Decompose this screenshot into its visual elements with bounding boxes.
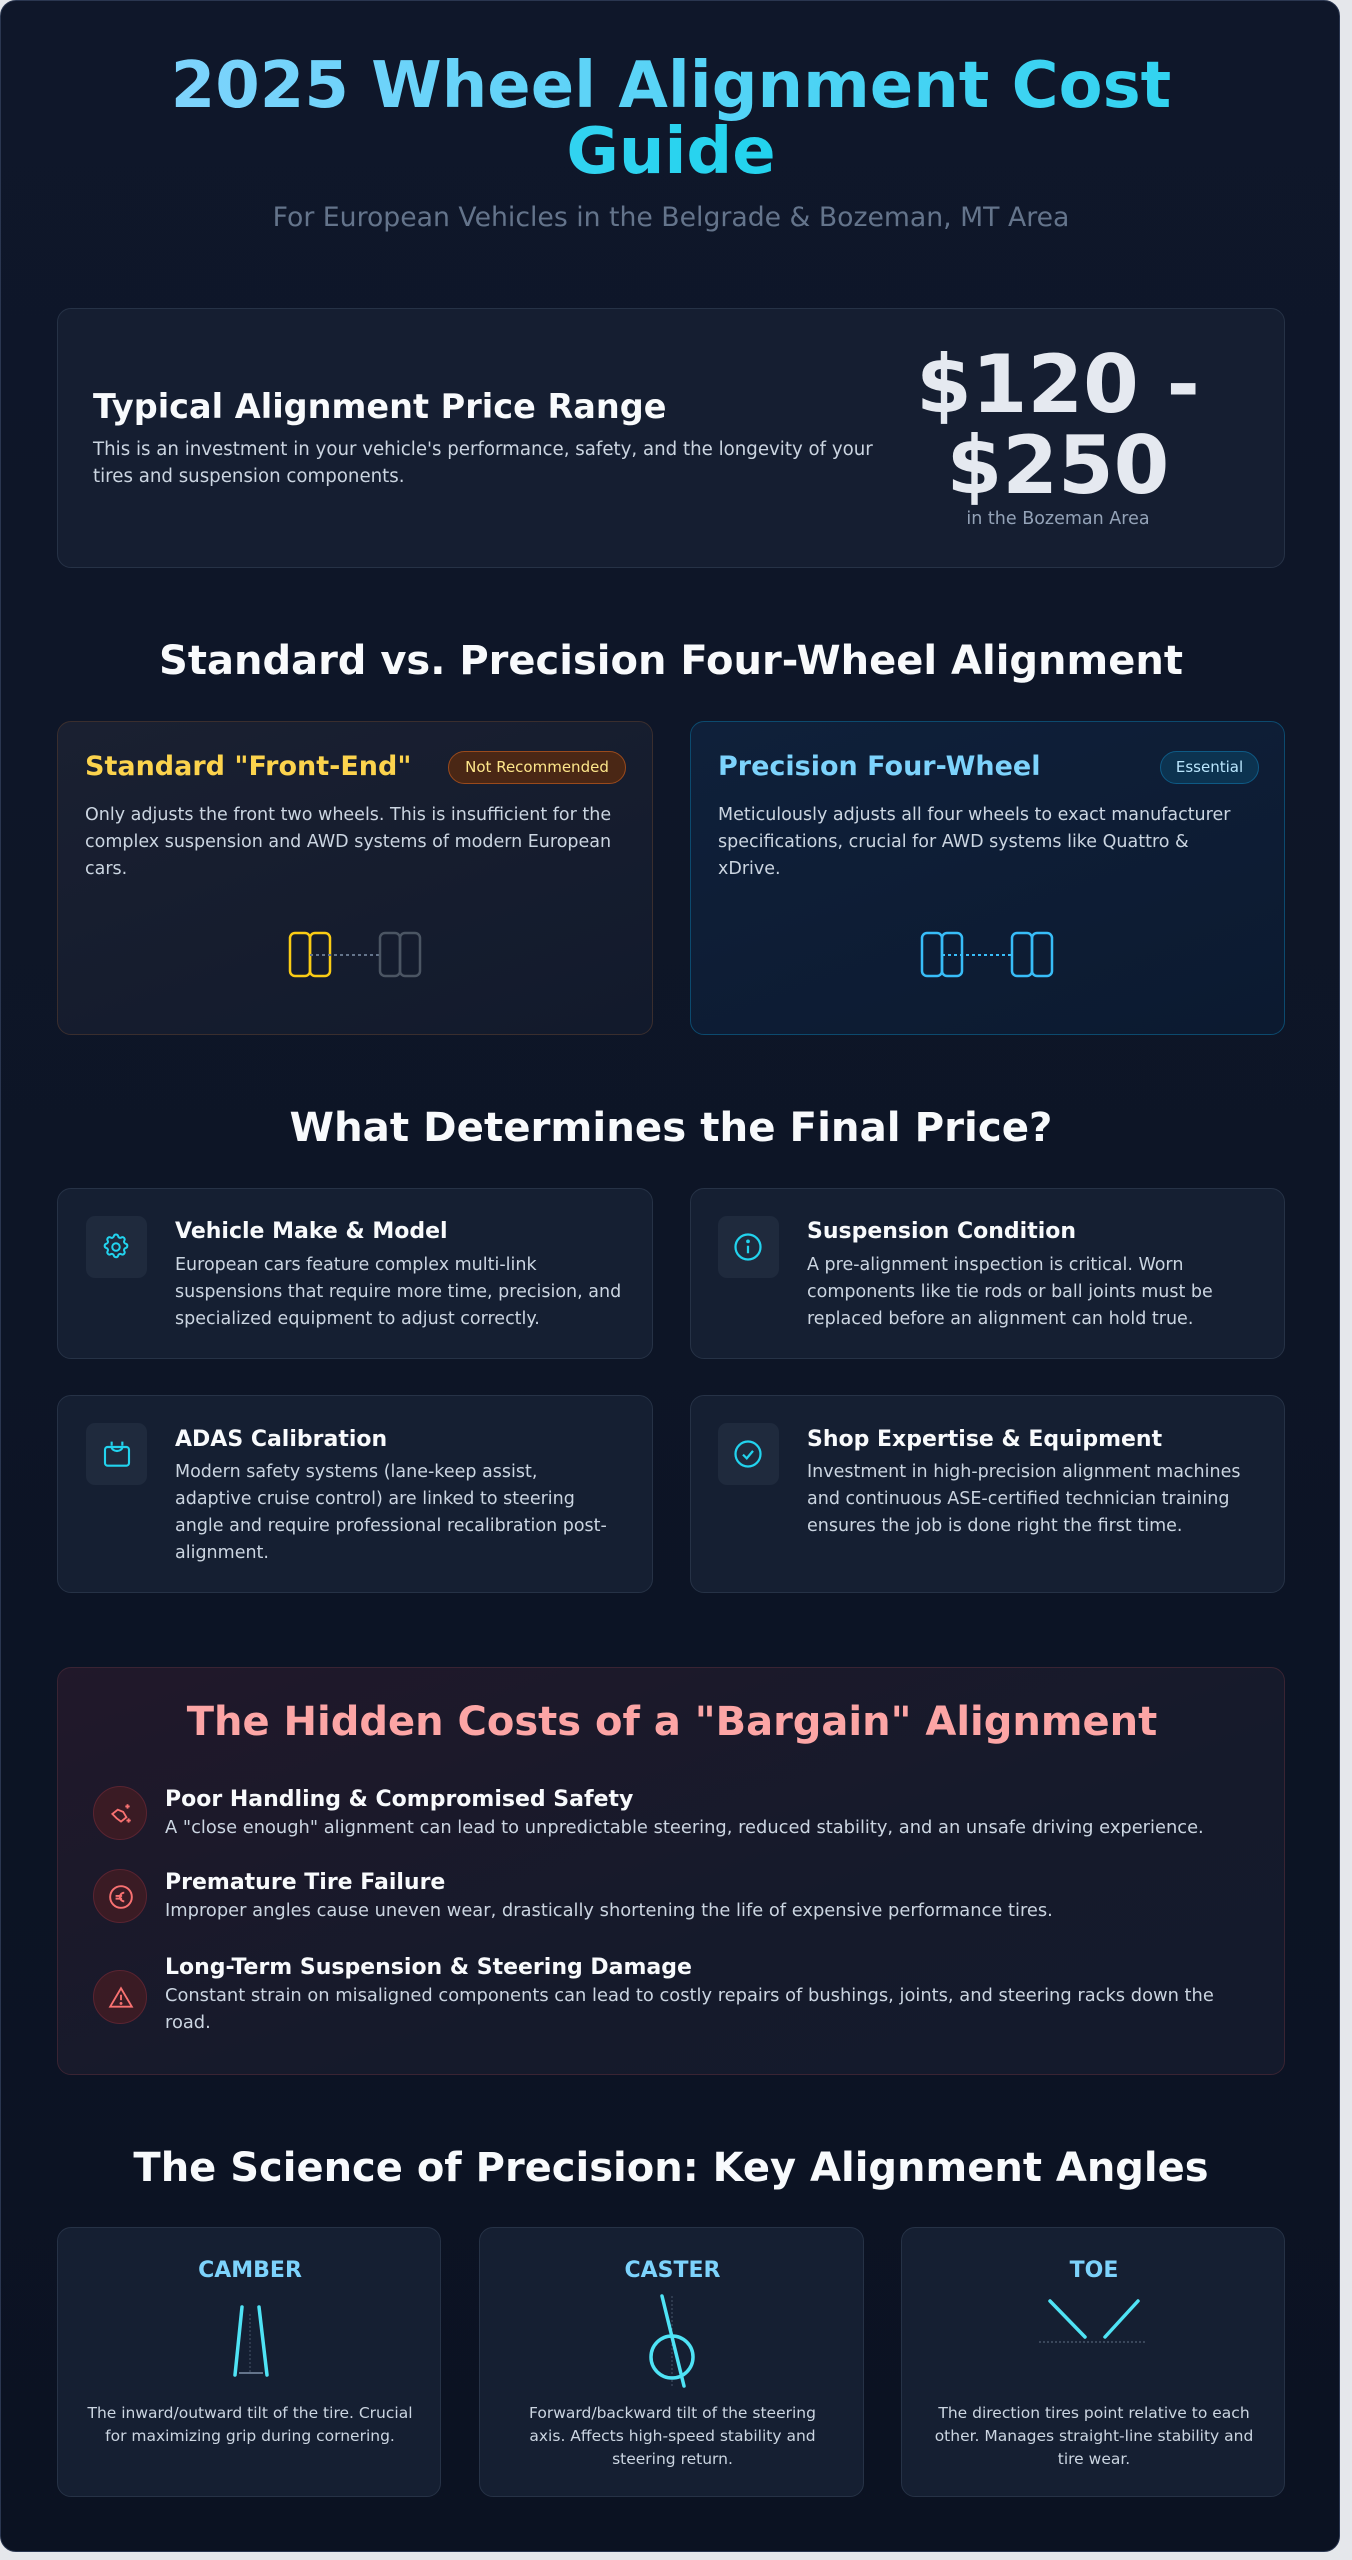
tire text: Improper angles cause uneven wear, drastically shortening the life of expensive performance tires.: [165, 1900, 1053, 1921]
card: caster: [479, 2227, 864, 2497]
badge: essential: Essential: [1176, 758, 1243, 776]
icon: check: [718, 1423, 779, 1485]
adas title: ADAS Calibration: [175, 1427, 387, 1452]
caster text: Forward/backward tilt of the steering axis. Affects high-speed stability and steering return.: [529, 2404, 816, 2468]
title: 2025 Wheel Alignment Cost: [171, 49, 1171, 123]
icon: caster: [649, 2294, 695, 2388]
subtitle: For European Vehicles in the Belgrade & Bozeman, MT Area: [273, 202, 1069, 233]
vehicle text: European cars feature complex multi-link suspensions that require more time, precision, and specialized equipment to adjust correctly.: [175, 1255, 621, 1329]
panel: hidden costs: [57, 1667, 1285, 2075]
price value: $250: [947, 419, 1169, 512]
card: shop expertise: [690, 1395, 1285, 1593]
item: tire failure: [93, 1869, 1053, 1923]
suspension text: A pre-alignment inspection is critical. Worn components like tie rods or ball joints must be replaced before an alignment can hold true.: [807, 1255, 1213, 1329]
precision title: Precision Four-Wheel: [718, 751, 1040, 782]
icon: sparkle: [93, 1786, 147, 1840]
shop text: Investment in high-precision alignment machines and continuous ASE-certified technician training ensures the job is done right the first time.: [807, 1462, 1240, 1536]
vehicle title: Vehicle Make & Model: [175, 1219, 448, 1244]
suspension title: Suspension Condition: [807, 1219, 1076, 1244]
item: poor handling: [93, 1786, 1204, 1840]
icon: front wheels: [288, 932, 422, 978]
camber label: CAMBER: [198, 2258, 302, 2283]
price description: This is an investment in your vehicle's performance, safety, and the longevity of your tires and suspension components.: [93, 439, 873, 487]
damage title: Long-Term Suspension & Steering Damage: [165, 1955, 692, 1980]
icon: camber: [233, 2305, 269, 2377]
camber text: The inward/outward tilt of the tire. Crucial for maximizing grip during cornering.: [87, 2404, 413, 2445]
panel: price range: [57, 308, 1285, 568]
adas text: Modern safety systems (lane-keep assist, adaptive cruise control) are linked to steering angle and require professional recalibration post-alignment.: [175, 1462, 607, 1563]
item: suspension damage: [93, 1955, 1214, 2033]
precision description: Meticulously adjusts all four wheels to exact manufacturer specifications, crucial for AWD systems like Quattro & xDrive.: [718, 805, 1230, 879]
icon: euro: [93, 1869, 147, 1923]
standard description: Only adjusts the front two wheels. This is insufficient for the complex suspension and AWD systems of modern European cars.: [85, 805, 611, 879]
hidden title: The Hidden Costs of a "Bargain" Alignment: [187, 1699, 1157, 1745]
card: vehicle make: [57, 1188, 653, 1359]
card: suspension condition: [690, 1188, 1285, 1359]
price value: $120 -: [916, 338, 1200, 431]
price heading: Typical Alignment Price Range: [93, 387, 666, 426]
badge: not recommended: [448, 751, 626, 784]
handling title: Poor Handling & Compromised Safety: [165, 1787, 633, 1812]
icon: info: [718, 1216, 779, 1278]
toe text: The direction tires point relative to each other. Manages straight-line stability and tire wear.: [935, 2404, 1253, 2468]
icon: four wheels: [920, 932, 1054, 978]
heading: science: The Science of Precision: Key Alignment Angles: [133, 2145, 1209, 2191]
badge: not recommended: Not Recommended: [465, 758, 609, 776]
standard title: Standard "Front-End": [85, 751, 411, 782]
price note: in the Bozeman Area: [966, 509, 1150, 529]
tire title: Premature Tire Failure: [165, 1870, 445, 1895]
handling text: A "close enough" alignment can lead to unpredictable steering, reduced stability, and an unsafe driving experience.: [165, 1817, 1204, 1838]
icon: toe: [1039, 2299, 1145, 2343]
title: [171, 49, 1171, 189]
card: camber: [57, 2227, 441, 2497]
card: adas: [57, 1395, 653, 1593]
badge: essential: [1160, 751, 1259, 784]
caster label: CASTER: [624, 2258, 720, 2283]
icon: adas box: [86, 1423, 147, 1485]
icon: gear: [86, 1216, 147, 1278]
title: Guide: [566, 115, 776, 189]
heading: final price: What Determines the Final Price?: [290, 1104, 1052, 1151]
icon: warning: [93, 1970, 147, 2024]
panel: standard front-end: [57, 721, 653, 1035]
damage text: Constant strain on misaligned components can lead to costly repairs of bushings, joints, and steering racks down the road.: [165, 1985, 1214, 2033]
heading: standard vs precision: Standard vs. Precision Four-Wheel Alignment: [159, 638, 1183, 684]
panel: precision four-wheel: [690, 721, 1285, 1035]
toe label: TOE: [1070, 2258, 1118, 2283]
price value: [916, 338, 1200, 512]
shop title: Shop Expertise & Equipment: [807, 1427, 1162, 1452]
card: toe: [901, 2227, 1285, 2497]
